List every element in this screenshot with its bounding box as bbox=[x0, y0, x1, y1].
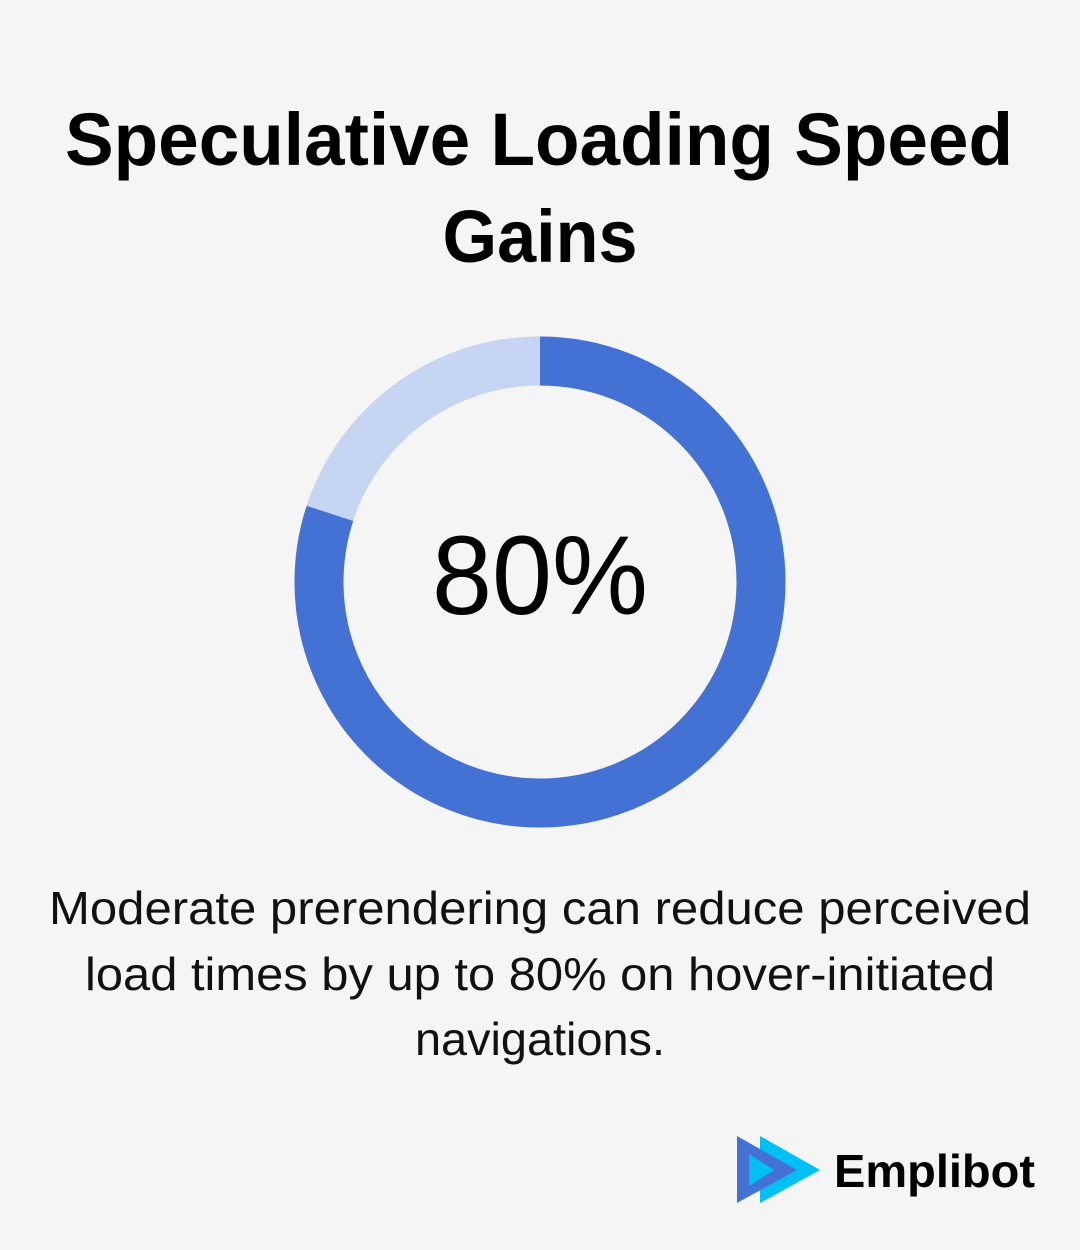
description text: Moderate prerendering can reduce perceived bbox=[49, 882, 1031, 934]
logo: Emplibot: Emplibot bbox=[834, 1145, 1035, 1197]
title: Gains bbox=[442, 195, 638, 278]
description text: load times by up to 80% on hover-initiated bbox=[85, 948, 995, 1000]
title bbox=[65, 98, 1013, 278]
logo: Emplibot bbox=[737, 1136, 1035, 1203]
center value: 80% bbox=[432, 513, 648, 638]
donut chart bbox=[319, 361, 761, 803]
description text bbox=[49, 882, 1031, 1065]
description text: navigations. bbox=[415, 1013, 665, 1065]
title: Speculative Loading Speed bbox=[65, 98, 1013, 181]
